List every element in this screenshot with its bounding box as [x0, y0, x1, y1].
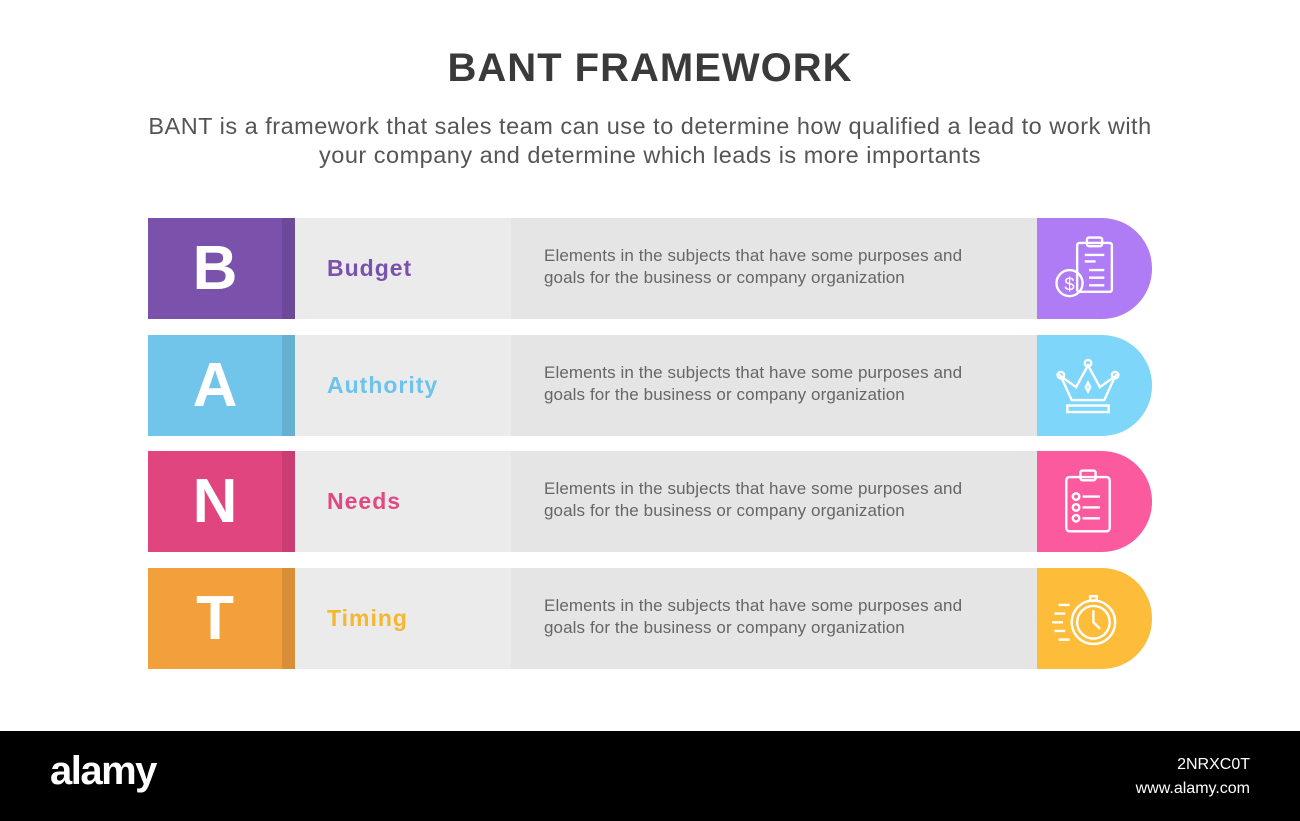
label budget: [295, 218, 511, 319]
letter N: N: [193, 467, 237, 536]
footer id: 2NRXC0T: [1177, 756, 1250, 773]
footer logo: alamy: [50, 749, 156, 793]
title: BANT FRAMEWORK: [447, 46, 853, 90]
letter A: [148, 335, 295, 436]
icon: budget clipboard: $: [1064, 274, 1075, 295]
icon: crown: [1037, 335, 1152, 436]
letter A: A: [193, 351, 237, 420]
subtitle: your company and determine which leads is more importants: [319, 142, 981, 168]
row: authority: [148, 335, 1152, 436]
label needs: [295, 451, 511, 552]
description: Elements in the subjects that have some purposes and: [544, 363, 962, 382]
label timing: Timing: [327, 605, 408, 631]
description: goals for the business or company organization: [544, 501, 905, 520]
label authority: [295, 335, 511, 436]
letter B: B: [193, 234, 237, 303]
footer bar: [0, 731, 1300, 821]
subtitle: BANT is a framework that sales team can use to determine how qualified a lead to work with: [148, 113, 1152, 139]
letter T: T: [196, 584, 234, 653]
description: goals for the business or company organization: [544, 618, 905, 637]
letter B: [148, 218, 295, 319]
description: goals for the business or company organization: [544, 385, 905, 404]
row: needs: [148, 451, 1152, 552]
icon: budget clipboard: [1037, 218, 1152, 319]
description: [511, 568, 1037, 669]
footer id: [1136, 756, 1250, 797]
description: Elements in the subjects that have some purposes and: [544, 246, 962, 265]
letter T: [148, 568, 295, 669]
subtitle: [148, 113, 1152, 168]
description: [511, 451, 1037, 552]
label timing: [295, 568, 511, 669]
label budget: Budget: [327, 255, 412, 281]
row: timing: [148, 568, 1152, 669]
label needs: Needs: [327, 488, 401, 514]
description: goals for the business or company organization: [544, 268, 905, 287]
description: Elements in the subjects that have some purposes and: [544, 479, 962, 498]
description: [511, 335, 1037, 436]
description: Elements in the subjects that have some purposes and: [544, 596, 962, 615]
label authority: Authority: [327, 372, 438, 398]
description: [511, 218, 1037, 319]
letter N: [148, 451, 295, 552]
icon: checklist: [1037, 451, 1152, 552]
footer id: www.alamy.com: [1136, 780, 1250, 797]
icon: stopwatch: [1037, 568, 1152, 669]
row: budget: [148, 218, 1152, 319]
